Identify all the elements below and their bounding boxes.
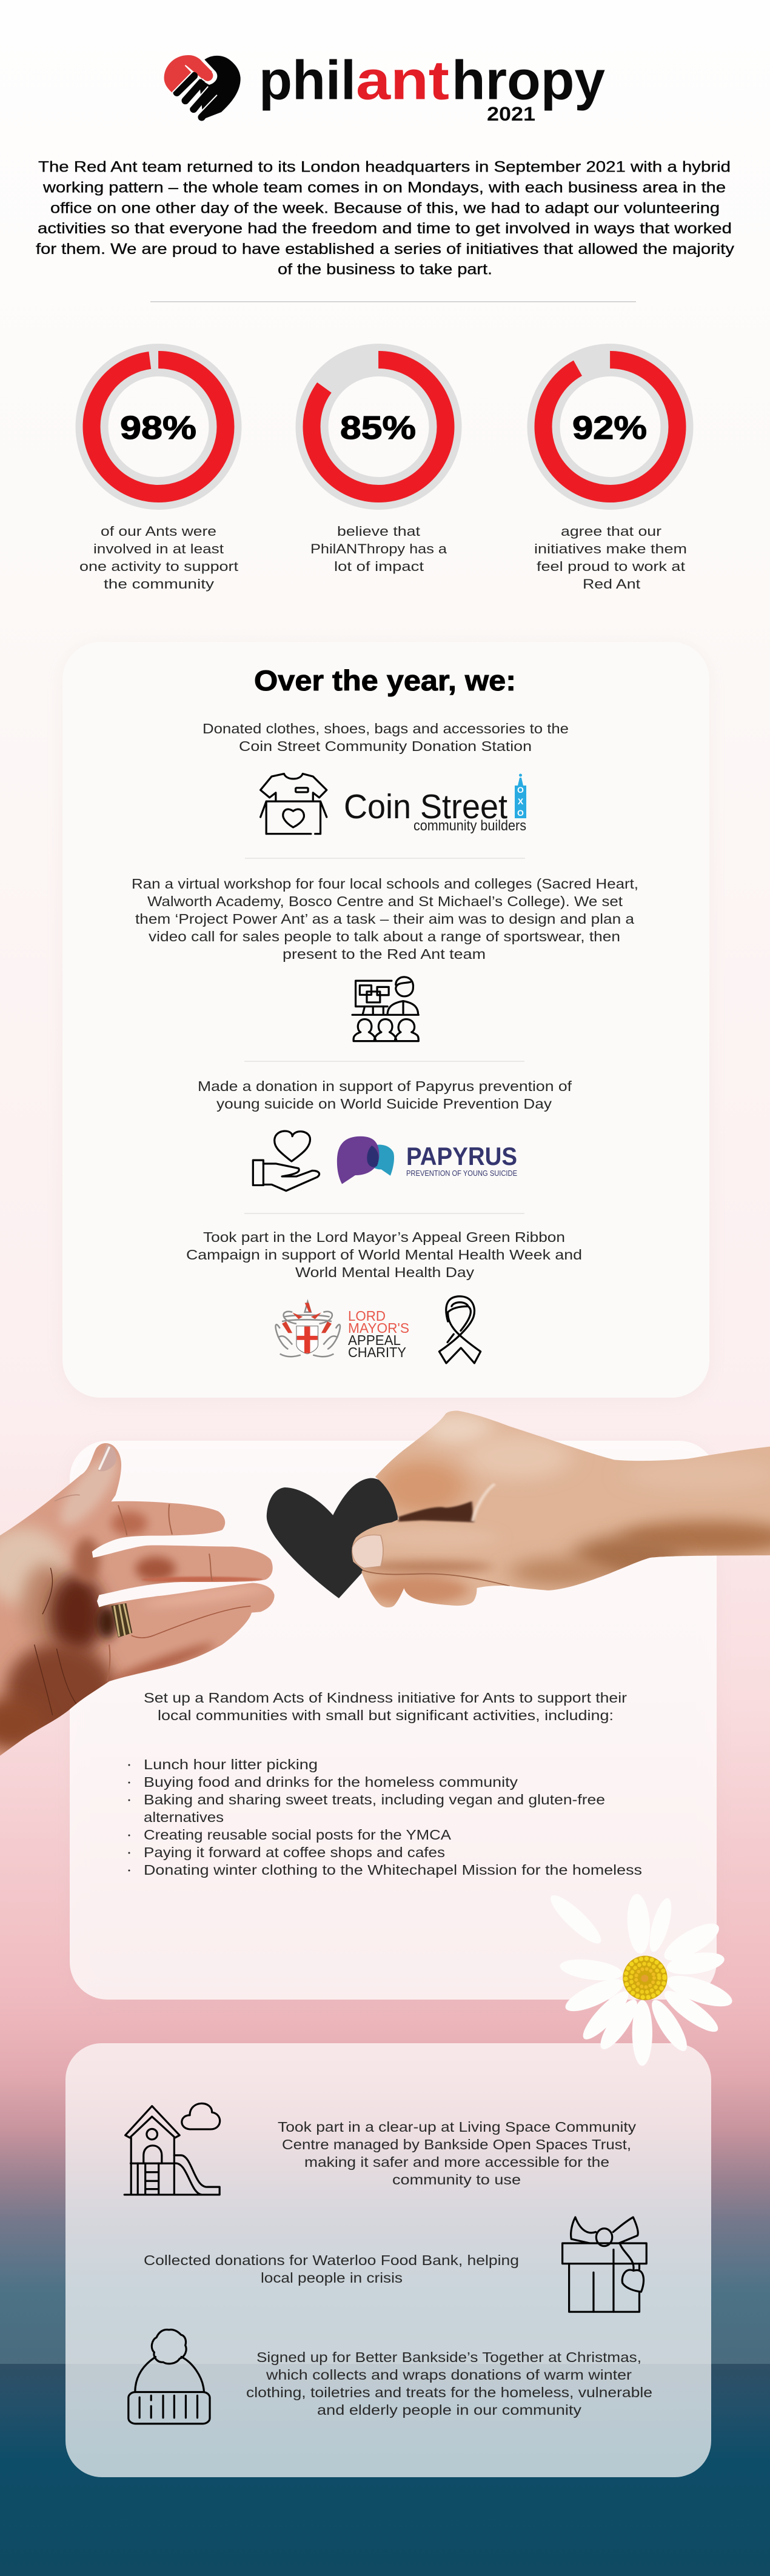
intro paragraph: for them. We are proud to have established a series of initiatives that allowed the majority [36,241,735,258]
stat: 98%: 98% [120,410,196,446]
wedding ring [111,1603,132,1638]
stat: 98% [79,360,238,592]
intro paragraph: of the business to take part. [278,261,492,278]
intro paragraph: The Red Ant team returned to its London headquarters in September 2021 with a hybrid [38,159,731,176]
text: clothes donation [203,721,569,754]
stat: 92% [534,360,687,592]
bullet list: Paying it forward at coffee shops and cafes [144,1844,445,1860]
bullet list: alternatives [144,1809,224,1825]
stat: 85%: lot of impact [334,559,424,574]
logo: philanthropy 2021 [164,50,605,125]
finger four shading [112,1639,216,1681]
text: Together at Christmas: and elderly people in our community [317,2402,582,2418]
text: Papyrus donation [198,1078,572,1112]
icon: awareness ribbon [439,1296,481,1363]
text: Papyrus donation: Made a donation in support of Papyrus prevention of [198,1078,572,1094]
stat: 85%: 85% [340,410,416,446]
logo: Papyrus: PAPYRUS [406,1142,517,1170]
photo: right hand [340,1406,770,1610]
flower centre [623,1956,668,2000]
text: clothes donation: Donated clothes, shoes, bags and accessories to the [203,721,569,736]
text: Green Ribbon campaign: World Mental Health Day [295,1264,475,1280]
text: clear-up [278,2119,637,2187]
stat: 98%: the community [104,576,214,592]
stat: 98%: of our Ants were [101,524,216,539]
wordmark: hropy [452,50,605,112]
stat: 85%: PhilANThropy has a [310,541,447,556]
logo: Coin Street: O [517,785,524,795]
intro paragraph: activities so that everyone had the freedom and time to get involved in ways that worked [38,220,732,237]
text: virtual workshop: video call for sales people to talk about a range of sportswear, then [149,929,620,944]
text: Green Ribbon campaign: Took part in the Lord Mayor’s Appeal Green Ribbon [203,1229,565,1245]
bullet list: Buying food and drinks for the homeless community [144,1774,518,1790]
logo: Papyrus: PREVENTION OF YOUNG SUICIDE [406,1169,517,1178]
text: clear-up: making it safer and more accessible for the [304,2154,609,2170]
stat: 98%: involved in at least [93,541,224,556]
text: virtual workshop: them ‘Project Power Ant’ as a task – their aim was to design and plan a [135,911,634,927]
icon: playhouse and slide [124,2103,220,2195]
text: Green Ribbon campaign: Campaign in support of World Mental Health Week and [186,1247,582,1263]
icon: hand holding heart [253,1131,320,1191]
photo: left hand [0,1436,283,1760]
icon: shirt in donation box [261,774,327,834]
heading: Over the year, we: [254,664,516,696]
text: food bank: Collected donations for Waterloo Food Bank, helping [144,2252,519,2268]
text: Together at Christmas [246,2349,652,2418]
logo: Lord Mayor's Appeal crest: MAYOR'S [348,1320,409,1336]
text: clear-up: Centre managed by Bankside Open Spaces Trust, [282,2137,631,2152]
logo: Lord Mayor's Appeal crest [276,1302,409,1360]
text: Together at Christmas: which collects and wraps donations of warm winter [266,2367,632,2383]
text: clothes donation: Coin Street Community Donation Station [239,738,532,754]
logo: Coin Street [344,773,526,834]
photo: black paper heart [267,1478,398,1598]
text: initiative intro: Set up a Random Acts of Kindness initiative for Ants to support their [144,1690,627,1706]
bullet list: Baking and sharing sweet treats, including vegan and gluten-free [144,1792,605,1807]
photo: daisy flower [545,1889,735,2066]
text: Green Ribbon campaign [186,1229,582,1280]
bullet list: Donating winter clothing to the Whitechapel Mission for the homeless [144,1862,642,1878]
logo: Coin Street: Coin Street [344,787,507,826]
text: virtual workshop [132,876,638,962]
bullet list [129,1757,642,1878]
finger shading [378,1461,466,1513]
text: food bank: local people in crisis [261,2270,403,2286]
text: food bank [144,2252,519,2286]
icon: gift box with heart tag [563,2217,646,2312]
text: Together at Christmas: clothing, toiletries and treats for the homeless, vulnerable [246,2384,652,2400]
bullet list: Lunch hour litter picking [144,1757,318,1772]
text: virtual workshop: Walworth Academy, Bosco Centre and St Michael’s College). We set [147,893,623,909]
logo: Lord Mayor's Appeal crest: APPEAL [348,1332,401,1348]
logo: Coin Street: O [517,808,524,818]
logo: Coin Street: X [518,796,524,806]
finger one shading [111,1511,147,1535]
icon: bobble hat [129,2329,210,2424]
stat: 98%: one activity to support [79,559,238,574]
text: initiative intro: local communities with small but significant activities, including: [158,1707,614,1723]
thumb nail [98,1444,116,1471]
stat: 85%: believe that [337,524,420,539]
text: Papyrus donation: young suicide on World Suicide Prevention Day [216,1096,552,1112]
logo: Lord Mayor's Appeal crest: CHARITY [348,1344,406,1360]
stat: 92%: initiatives make them [534,541,687,556]
logo: Papyrus [337,1136,517,1184]
panel: local community [65,2043,711,2477]
text: clear-up: community to use [392,2172,521,2187]
icon: presentation to audience [352,977,418,1041]
logo: Coin Street: community builders [413,818,526,834]
logo: Lord Mayor's Appeal crest: LORD [348,1308,386,1324]
panel: over the year [62,642,709,1401]
thumb nail [352,1535,383,1568]
year: 2021 [487,103,535,125]
stat: 92%: Red Ant [583,576,640,592]
text: clear-up: Took part in a clear-up at Living Space Community [278,2119,637,2135]
intro paragraph: working pattern – the whole team comes in on Mondays, with each business area in the [42,179,726,196]
panel: random acts of kindness [70,1441,717,2003]
intro paragraph: office on one other day of the week. Because of this, we had to adapt our volunteering [50,199,720,216]
text: Together at Christmas: Signed up for Better Bankside’s Together at Christmas, [256,2349,641,2365]
intro paragraph [36,159,735,278]
stat: 92%: 92% [572,410,647,446]
stat: 92%: feel proud to work at [537,559,685,574]
text: initiative intro [144,1690,627,1723]
wordmark: ant [356,50,449,112]
icon: heart of clasped hands [164,55,241,119]
bullet list: Creating reusable social posts for the YMCA [144,1827,452,1843]
stat: 92%: agree that our [561,524,661,539]
text: virtual workshop: present to the Red Ant team [283,946,486,962]
stat: 85% [310,360,447,574]
finger three shading [150,1580,262,1607]
wordmark [259,50,605,112]
thumb shading [392,1520,479,1543]
wordmark: phil [259,50,356,112]
text: virtual workshop: Ran a virtual workshop for four local schools and colleges (Sacred Heart, [132,876,638,892]
finger two shading [135,1557,176,1581]
